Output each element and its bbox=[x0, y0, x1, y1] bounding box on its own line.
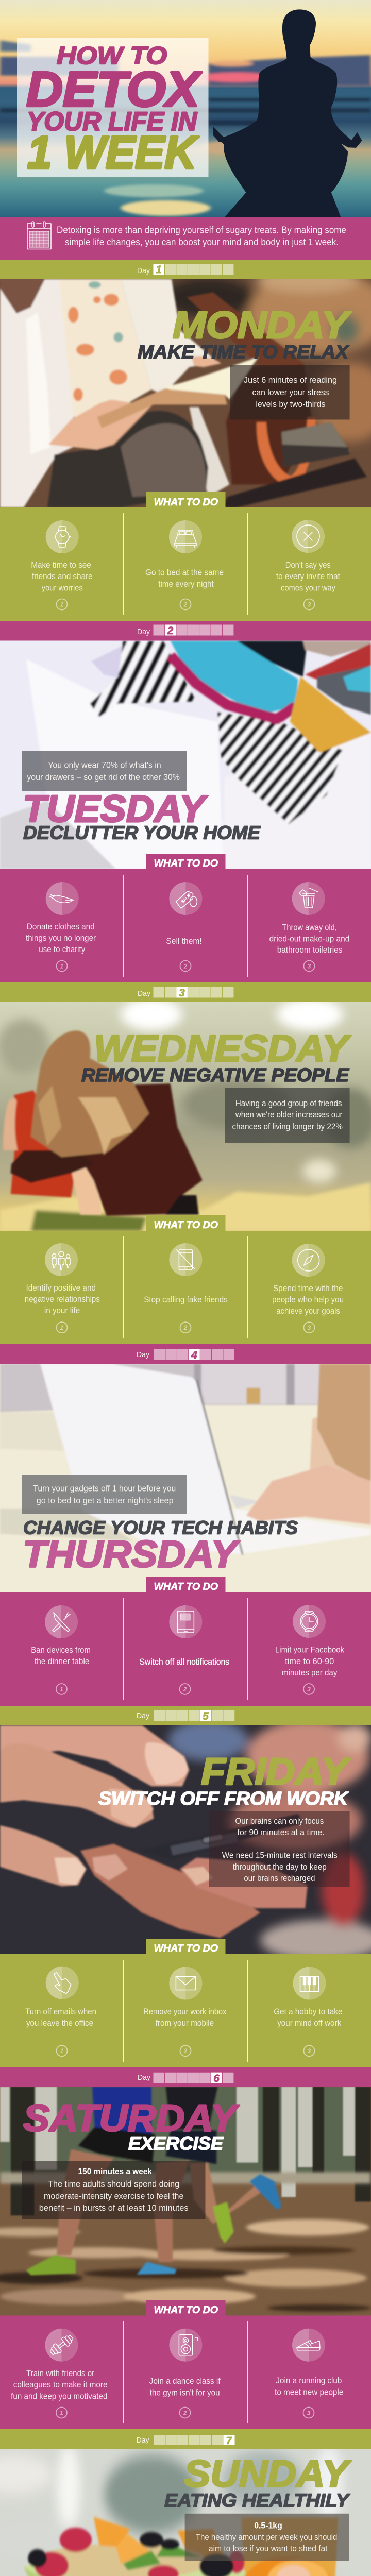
action 3: minutes per day bbox=[282, 1668, 338, 1677]
day bar 1: 1 bbox=[156, 264, 162, 276]
tab: what to do bbox=[146, 1577, 226, 1592]
photo: two friends hugging on grass bbox=[0, 1002, 371, 1231]
tab: what to do bbox=[146, 492, 226, 508]
heading: Sunday bbox=[164, 2453, 352, 2511]
action 1: Ban devices from bbox=[31, 1646, 91, 1655]
action 2 bbox=[144, 1243, 228, 1333]
action 2: from your mobile bbox=[156, 2019, 214, 2028]
action 3: to meet new people bbox=[275, 2388, 343, 2397]
action 2: 2 bbox=[183, 962, 188, 970]
callout: wardrobe: your drawers – so get rid of the other 30% bbox=[27, 773, 180, 782]
action 3: 3 bbox=[307, 1686, 311, 1693]
heading: Thursday bbox=[23, 1517, 298, 1575]
tab: what to do: WHAT TO DO bbox=[154, 497, 218, 508]
heading: Monday bbox=[138, 304, 352, 363]
day bar 5: Day bbox=[137, 1711, 149, 1720]
action 1 bbox=[25, 1243, 100, 1333]
panel: Tuesday actions bbox=[0, 869, 371, 982]
action 1: in your life bbox=[44, 1306, 80, 1315]
callout: reading bbox=[230, 365, 350, 419]
action 2: 2 bbox=[183, 2409, 187, 2416]
callout: focus: Our brains can only focus bbox=[235, 1817, 324, 1826]
callout: friends: chances of living longer by 22% bbox=[232, 1122, 343, 1131]
day bar 4: Day bbox=[137, 1350, 149, 1359]
action 1: 1 bbox=[60, 2409, 63, 2416]
heading: Monday: MONDAY bbox=[173, 304, 352, 346]
tab: what to do bbox=[146, 854, 226, 869]
action 1: the dinner table bbox=[35, 1657, 90, 1666]
action 2: 2 bbox=[183, 1324, 188, 1331]
action 2: Stop calling fake friends bbox=[144, 1295, 228, 1304]
intro band bbox=[0, 217, 371, 260]
day bar 6 bbox=[0, 2067, 371, 2087]
day bar 3: Day bbox=[138, 989, 150, 998]
day bar 1 bbox=[0, 260, 371, 279]
action 1: colleagues to make it more bbox=[13, 2380, 108, 2389]
callout: wardrobe: You only wear 70% of what's in bbox=[48, 761, 161, 770]
heading: Wednesday: REMOVE NEGATIVE PEOPLE bbox=[81, 1064, 349, 1086]
callout: 0.5-1kg: The healthy amount per week you should bbox=[196, 2533, 337, 2542]
action 1: 1 bbox=[60, 962, 64, 970]
day bar 7: Day bbox=[136, 2436, 149, 2445]
action 1 bbox=[31, 520, 93, 610]
action 1: negative relationships bbox=[25, 1295, 100, 1304]
callout: 0.5-1kg: 0.5-1kg bbox=[254, 2521, 282, 2531]
heading: Tuesday bbox=[23, 788, 261, 843]
action 3: 3 bbox=[307, 2409, 311, 2416]
action 2 bbox=[149, 2329, 221, 2418]
callout: gadgets: Turn your gadgets off 1 hour before you bbox=[33, 1484, 176, 1494]
panel: Saturday actions bbox=[0, 2315, 371, 2429]
action 1: use to charity bbox=[39, 945, 86, 954]
heading: Friday: SWITCH OFF FROM WORK bbox=[98, 1788, 349, 1809]
action 3: bathroom toiletries bbox=[277, 945, 342, 955]
callout: gadgets: go to bed to get a better night's sleep bbox=[37, 1496, 174, 1505]
action 1 bbox=[31, 1605, 91, 1694]
callout: friends bbox=[225, 1088, 350, 1143]
callout: reading: levels by two-thirds bbox=[256, 400, 325, 409]
tab: what to do: WHAT TO DO bbox=[154, 1581, 218, 1592]
callout: friends: when we're older increases our bbox=[235, 1110, 343, 1120]
heading: Thursday: THURSDAY bbox=[23, 1533, 241, 1575]
action 3 bbox=[275, 2329, 343, 2418]
action 3 bbox=[276, 520, 340, 610]
action 3: dried-out make-up and bbox=[269, 935, 349, 944]
action 3: 3 bbox=[308, 962, 311, 970]
action 1: Make time to see bbox=[31, 561, 91, 570]
title panel: 1 WEEK bbox=[27, 127, 199, 178]
photo: oats bowl with fruit bbox=[0, 2449, 371, 2576]
action 3: Join a running club bbox=[276, 2376, 342, 2385]
callout: gadgets bbox=[22, 1475, 187, 1514]
action 3: 3 bbox=[308, 1324, 311, 1331]
action 1: things you no longer bbox=[26, 934, 96, 943]
callout: 150 minutes: moderate-intensity exercise to feel the bbox=[44, 2192, 183, 2201]
panel: Friday actions bbox=[0, 1954, 371, 2067]
tab: what to do bbox=[146, 1215, 226, 1231]
action 3: people who help you bbox=[272, 1295, 344, 1304]
photo: woman typing on white laptop in bed bbox=[0, 1364, 371, 1592]
callout: 150 minutes: The time adults should spend doing bbox=[48, 2179, 179, 2189]
action 3: your mind off work bbox=[277, 2019, 342, 2028]
title panel: DETOX bbox=[26, 62, 202, 117]
icon: calendar bbox=[27, 222, 51, 249]
callout: focus: We need 15-minute rest intervals bbox=[222, 1851, 338, 1860]
action 2: 2 bbox=[183, 1686, 187, 1693]
heading: Sunday: SUNDAY bbox=[184, 2453, 352, 2495]
action 2: Remove your work inbox bbox=[143, 2007, 227, 2016]
day bar 6: Day bbox=[138, 2073, 150, 2082]
action 3: Throw away old, bbox=[282, 923, 337, 933]
callout: wardrobe bbox=[22, 751, 187, 791]
panel: Thursday actions bbox=[0, 1592, 371, 1706]
day bar 7 bbox=[0, 2429, 371, 2449]
action 2 bbox=[143, 1967, 227, 2056]
action 2 bbox=[139, 1605, 229, 1694]
action 1: Train with friends or bbox=[26, 2369, 95, 2378]
tab: what to do bbox=[146, 2300, 226, 2316]
callout: focus: throughout the day to keep bbox=[233, 1862, 327, 1872]
heading: Saturday: SATURDAY bbox=[23, 2098, 240, 2139]
action 1: Turn off emails when bbox=[25, 2007, 96, 2016]
action 2: Go to bed at the same bbox=[145, 568, 224, 577]
tab: what to do: WHAT TO DO bbox=[154, 2304, 218, 2316]
action 1: 1 bbox=[60, 1324, 64, 1331]
tab: what to do: WHAT TO DO bbox=[154, 1219, 218, 1231]
action 2: time every night bbox=[158, 580, 214, 589]
day bar 1: Day bbox=[137, 266, 150, 275]
panel: Monday actions bbox=[0, 507, 371, 621]
action 1: Identify positive and bbox=[26, 1283, 96, 1293]
day bar 5: 5 bbox=[203, 1710, 209, 1722]
action 1: you leave the office bbox=[26, 2019, 93, 2028]
callout: focus: our brains recharged bbox=[244, 1874, 315, 1883]
day bar 3: 3 bbox=[179, 987, 185, 999]
callout: 150 minutes: benefit – in bursts of at least 10 minutes bbox=[39, 2204, 189, 2213]
action 1: 1 bbox=[60, 2047, 64, 2055]
day bar 5 bbox=[0, 1706, 371, 1725]
day bar 7: 7 bbox=[226, 2435, 232, 2447]
action 1: 1 bbox=[60, 1686, 63, 1693]
callout: 0.5-1kg: aim to lose if you want to shed fat bbox=[209, 2544, 328, 2553]
heading: Tuesday: DECLUTTER YOUR HOME bbox=[23, 822, 261, 843]
action 3: to every invite that bbox=[276, 572, 340, 581]
action 2: Sell them! bbox=[166, 937, 202, 946]
action 2 bbox=[145, 520, 224, 610]
callout: friends: Having a good group of friends bbox=[235, 1099, 342, 1108]
action 3: Don't say yes bbox=[285, 561, 331, 570]
callout: 150 minutes: 150 minutes a week bbox=[78, 2167, 153, 2176]
action 2: 2 bbox=[183, 601, 188, 608]
heading: Tuesday: TUESDAY bbox=[23, 788, 208, 830]
photo: hands holding a smartphone bbox=[0, 1725, 371, 1954]
heading: Saturday: EXERCISE bbox=[128, 2133, 224, 2154]
hero photo: meditating woman on beach at sunset bbox=[0, 0, 371, 217]
action 3: 3 bbox=[308, 601, 311, 608]
photo: runners on a forest trail bbox=[0, 2087, 371, 2315]
tab: what to do: WHAT TO DO bbox=[154, 1943, 218, 1954]
heading: Friday: FRIDAY bbox=[201, 1751, 351, 1793]
title panel bbox=[17, 38, 208, 178]
action 3: Get a hobby to take bbox=[274, 2007, 342, 2016]
intro text bbox=[57, 225, 346, 247]
callout: focus bbox=[209, 1811, 350, 1887]
action 1: fun and keep you motivated bbox=[11, 2392, 107, 2401]
action 1: Donate clothes and bbox=[27, 922, 95, 931]
day bar 2 bbox=[0, 621, 371, 641]
action 1: friends and share bbox=[32, 572, 93, 581]
action 2: Join a dance class if bbox=[149, 2377, 221, 2386]
action 1: your worries bbox=[42, 583, 83, 592]
action 3: 3 bbox=[308, 2047, 311, 2055]
day bar 6: 6 bbox=[213, 2073, 220, 2084]
action 2: the gym isn't for you bbox=[150, 2388, 220, 2398]
action 2: SALE bbox=[180, 893, 192, 904]
photo: woman reading on a bench bbox=[0, 279, 371, 507]
action 2: Switch off all notifications bbox=[139, 1657, 229, 1667]
heading: Wednesday: WEDNESDAY bbox=[94, 1028, 352, 1070]
callout: 0.5-1kg bbox=[185, 2514, 349, 2561]
tab: what to do: WHAT TO DO bbox=[154, 858, 218, 869]
action 1: 1 bbox=[60, 601, 64, 608]
action 3 bbox=[272, 1244, 344, 1333]
panel: Wednesday actions bbox=[0, 1231, 371, 1344]
intro text: simple life changes, you can boost your mind and body in just 1 week. bbox=[65, 237, 339, 247]
action 3: time to 60-90 bbox=[285, 1657, 334, 1666]
callout: reading: can lower your stress bbox=[252, 388, 329, 397]
action 3 bbox=[269, 882, 349, 972]
callout: focus: for 90 minutes at a time. bbox=[238, 1828, 325, 1837]
heading: Saturday bbox=[23, 2098, 240, 2154]
title panel: YOUR LIFE IN bbox=[27, 107, 197, 136]
action 2: 2 bbox=[183, 2047, 188, 2055]
heading: Thursday: CHANGE YOUR TECH HABITS bbox=[23, 1517, 298, 1538]
action 1 bbox=[11, 2329, 107, 2418]
action 3: Spend time with the bbox=[273, 1284, 343, 1293]
action 3 bbox=[275, 1605, 345, 1694]
action 2 bbox=[166, 882, 202, 972]
heading: Wednesday bbox=[81, 1028, 352, 1086]
heading: Sunday: EATING HEALTHILY bbox=[164, 2489, 350, 2511]
action 3: comes your way bbox=[281, 583, 336, 592]
title panel: HOW TO bbox=[57, 42, 167, 69]
intro text: Detoxing is more than depriving yourself of sugary treats. By making some bbox=[57, 225, 346, 235]
callout: 150 minutes bbox=[22, 2161, 205, 2219]
action 3: Limit your Facebook bbox=[275, 1646, 345, 1655]
action 1 bbox=[25, 1967, 96, 2056]
day bar 4: 4 bbox=[191, 1349, 197, 1361]
day bar 4 bbox=[0, 1344, 371, 1364]
tab: what to do bbox=[146, 1939, 226, 1954]
day bar 2: 2 bbox=[167, 625, 174, 637]
callout: reading: Just 6 minutes of reading bbox=[244, 376, 337, 385]
heading: Monday: MAKE TIME TO RELAX bbox=[138, 341, 349, 363]
photo: clothes piled on white sofa bbox=[0, 641, 371, 869]
heading: Friday bbox=[98, 1751, 351, 1809]
day bar 3 bbox=[0, 982, 371, 1002]
action 1 bbox=[26, 882, 96, 972]
day bar 2: Day bbox=[137, 628, 150, 636]
action 3 bbox=[274, 1967, 342, 2056]
action 3: achieve your goals bbox=[276, 1307, 340, 1316]
